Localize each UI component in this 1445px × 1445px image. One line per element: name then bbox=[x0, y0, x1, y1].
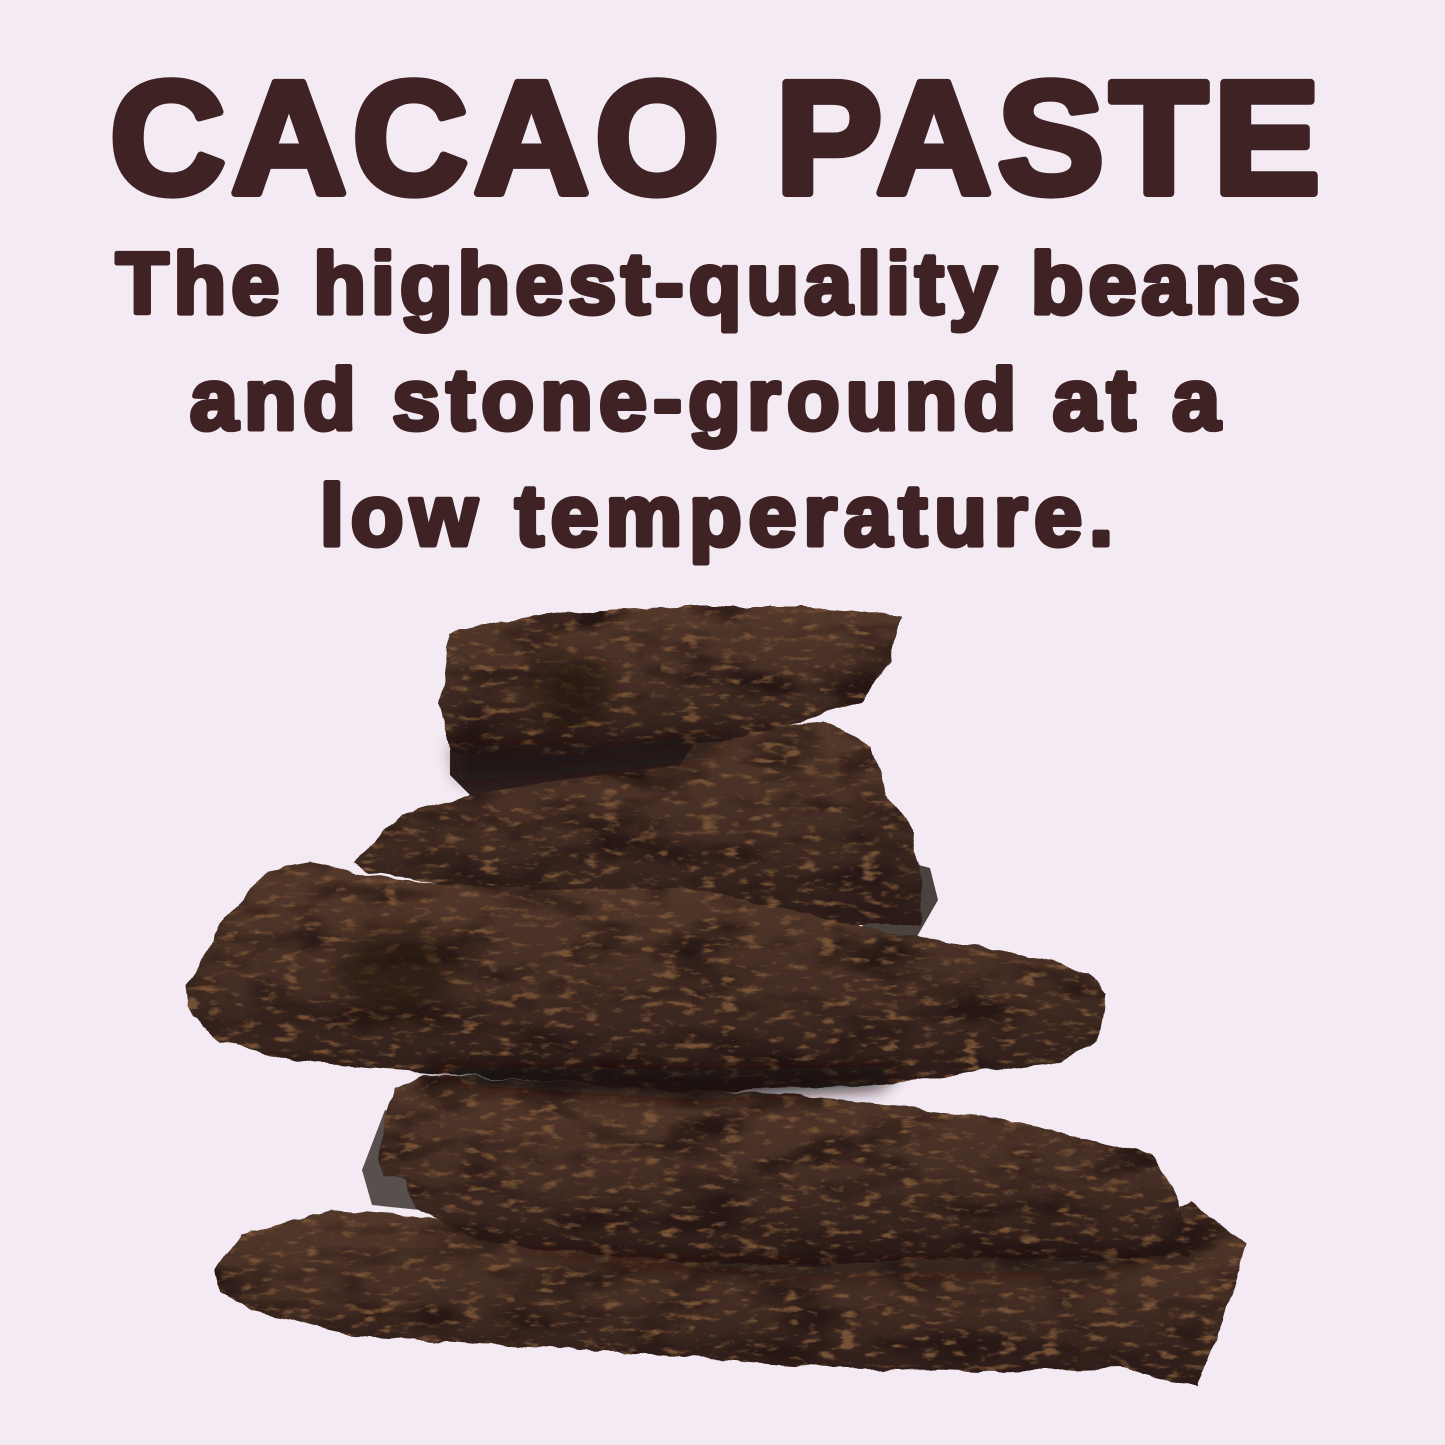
dent: top piece bbox=[540, 658, 610, 722]
shadow between large and lower slabs bbox=[420, 1065, 900, 1100]
piece: second slab bbox=[352, 722, 922, 925]
subtitle text block bbox=[116, 236, 1300, 564]
piece: fourth slab bbox=[378, 1074, 1190, 1266]
piece: large middle slab bbox=[188, 862, 1106, 1092]
title: CACAO PASTE bbox=[110, 48, 1326, 227]
piece: grey edge behind lower slab bbox=[362, 1110, 420, 1210]
subtitle text block: low temperature. bbox=[320, 468, 1113, 564]
subtitle text block: The highest-quality beans bbox=[116, 236, 1300, 332]
illustration: stack of cacao paste pieces bbox=[188, 606, 1245, 1386]
dent: large piece bbox=[340, 930, 450, 1020]
piece: bottom slab bbox=[217, 1200, 1245, 1386]
shadow under the top slab bbox=[452, 730, 740, 780]
piece: grey edge behind second slab bbox=[860, 860, 938, 940]
shadow between bottom slabs bbox=[420, 1225, 1180, 1276]
subtitle text block: and stone-ground at a bbox=[190, 352, 1221, 448]
piece: under-top shadow bbox=[450, 735, 700, 795]
piece: top slab bbox=[438, 606, 900, 756]
